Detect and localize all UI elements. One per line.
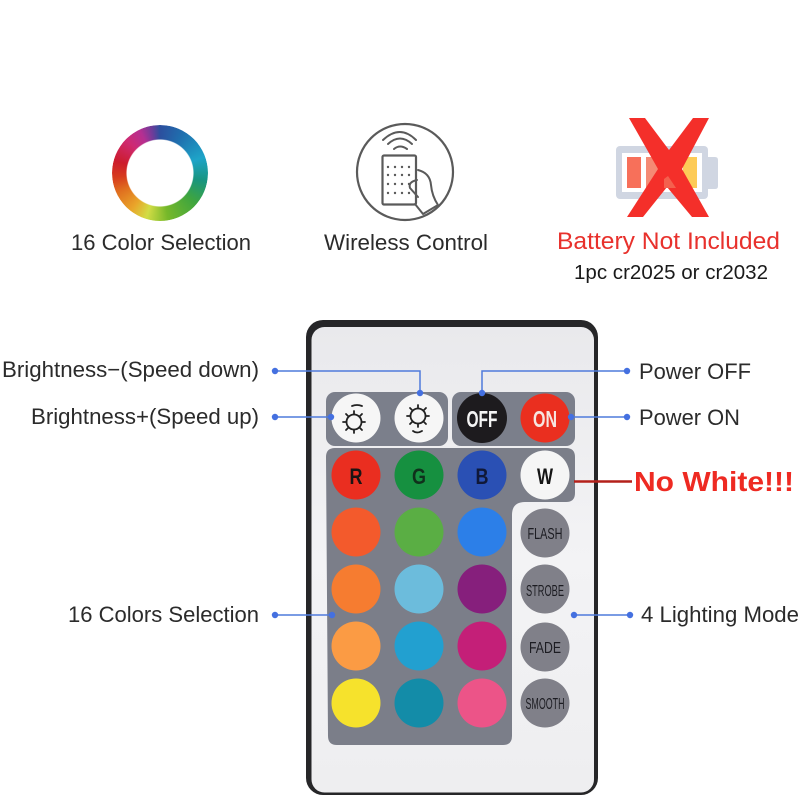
- button: flash: [520, 508, 570, 558]
- callout: 4 lighting mode: 4 Lighting Mode: [641, 602, 799, 627]
- button: W: [520, 450, 570, 500]
- label: battery not included: Battery Not Included: [557, 228, 780, 255]
- button: strobe: [520, 564, 570, 614]
- label: 16 color selection: 16 Color Selection: [71, 230, 251, 255]
- button: fade: [520, 622, 570, 672]
- button: brightness down: [394, 394, 444, 442]
- color buttons grid: [332, 508, 506, 728]
- button: on: ON: [533, 406, 557, 432]
- callout: brightness down: Brightness−(Speed down): [2, 357, 259, 382]
- callout: no white: No White!!!: [634, 466, 794, 497]
- button: W: W: [537, 464, 553, 489]
- callout: 4 lighting mode: [571, 602, 799, 627]
- label: wireless control: Wireless Control: [324, 230, 488, 255]
- callout: power off: [479, 359, 751, 396]
- button: B: B: [476, 464, 488, 489]
- callout: power on: Power ON: [639, 405, 740, 430]
- icon: crossed-out battery: [616, 118, 718, 217]
- button: strobe: STROBE: [526, 583, 564, 600]
- callout: 16 colors selection: 16 Colors Selection: [68, 602, 259, 627]
- callout: power on: [568, 405, 740, 430]
- button: smooth: SMOOTH: [526, 696, 564, 713]
- panel: color buttons: [326, 448, 575, 745]
- button: R: R: [350, 464, 363, 489]
- button: brightness up: [332, 394, 380, 442]
- callout: brightness down: [2, 357, 423, 396]
- remote control: [306, 320, 598, 795]
- callout: power off: Power OFF: [639, 359, 751, 384]
- button: B: [458, 450, 506, 500]
- icon: color ring: [112, 125, 208, 221]
- button: R: [332, 450, 380, 500]
- button: G: [394, 450, 444, 500]
- mode buttons: [520, 508, 570, 728]
- button: fade: FADE: [529, 640, 561, 657]
- label: battery type: 1pc cr2025 or cr2032: [574, 262, 768, 284]
- button: G: G: [412, 464, 426, 489]
- callout: brightness up: Brightness+(Speed up): [31, 404, 259, 429]
- button: off: OFF: [466, 406, 498, 432]
- button: smooth: [520, 678, 570, 728]
- icon: wireless control: [357, 124, 453, 220]
- button: flash: FLASH: [528, 526, 562, 543]
- panel: power buttons: [452, 392, 575, 446]
- panel: brightness buttons: [326, 392, 448, 446]
